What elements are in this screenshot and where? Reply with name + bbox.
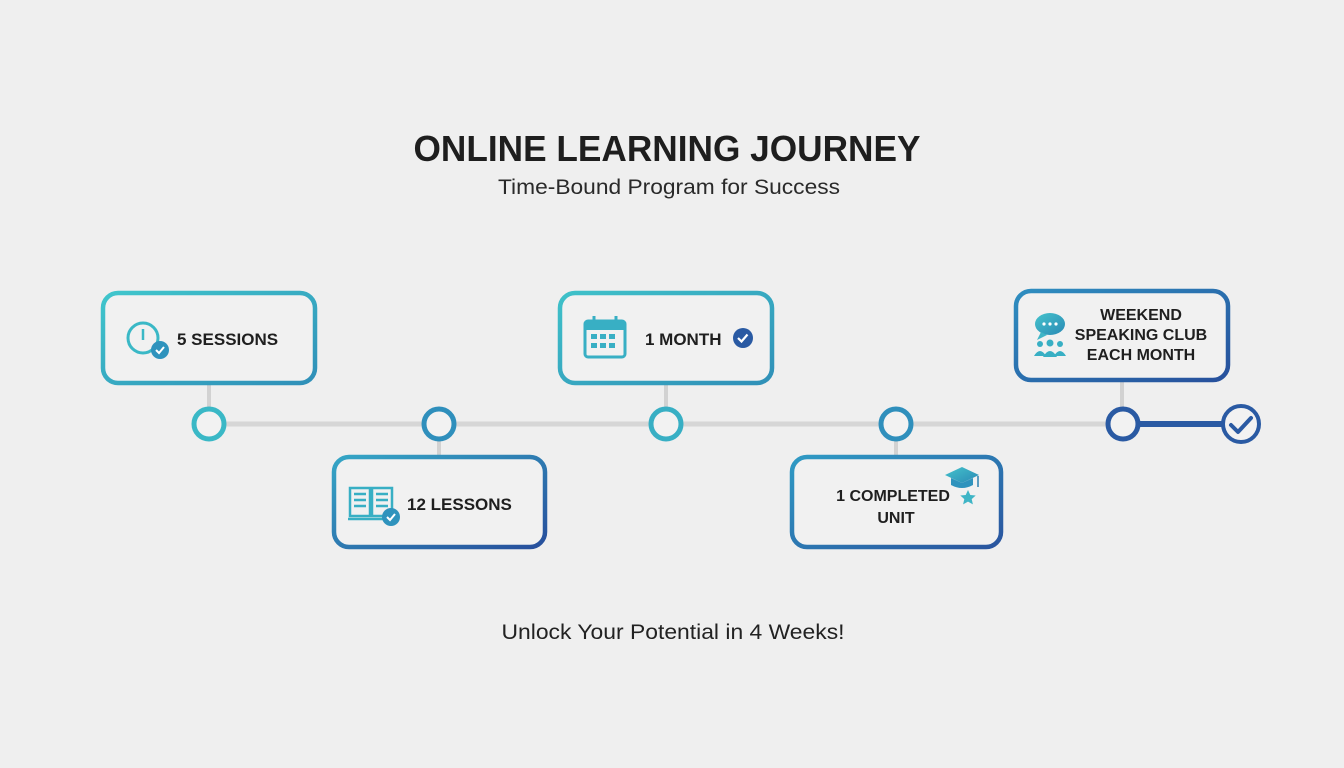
panel: weekend speaking club: SPEAKING CLUB	[1075, 327, 1207, 344]
icon: graduation cap and star	[945, 467, 979, 504]
title: ONLINE LEARNING JOURNEY	[414, 128, 920, 169]
panel: 1 month: 1 MONTH	[645, 330, 722, 349]
icon: chat group	[1034, 313, 1066, 357]
panel: 5 sessions: 5 SESSIONS	[177, 330, 278, 349]
panel: weekend speaking club: WEEKEND	[1100, 307, 1182, 324]
panel: 1 month	[560, 293, 772, 383]
icon: book	[348, 488, 394, 519]
panel: 1 completed unit: UNIT	[877, 510, 915, 527]
panel: weekend speaking club	[1016, 291, 1228, 380]
icon: clock	[128, 323, 169, 359]
subtitle: Time-Bound Program for Success	[498, 176, 840, 199]
panel: 5 sessions	[103, 293, 315, 383]
panel: weekend speaking club: EACH MONTH	[1087, 347, 1195, 364]
icon: calendar	[585, 316, 625, 357]
footer tagline: Unlock Your Potential in 4 Weeks!	[502, 621, 844, 644]
panel: 1 completed unit	[792, 457, 1001, 547]
icon: check badge	[733, 328, 753, 348]
timeline	[194, 382, 1259, 456]
panel: 12 lessons	[334, 457, 545, 547]
panel: 12 lessons: 12 LESSONS	[407, 495, 512, 514]
panel: 1 completed unit: 1 COMPLETED	[836, 488, 950, 505]
icon: final check	[1223, 406, 1259, 442]
